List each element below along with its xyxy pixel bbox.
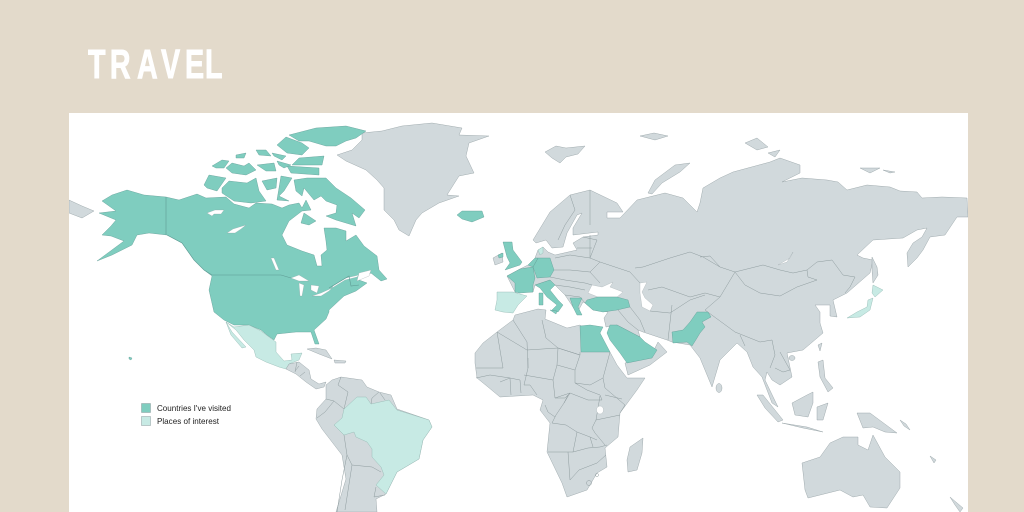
Italy [535,280,563,314]
Egypt [580,325,610,352]
Central America and Caribbean [286,348,346,389]
Chukotka west edge [69,200,94,218]
Brazil [334,397,432,494]
South America borders [317,377,385,512]
Saudi Arabia [607,325,657,363]
South America [316,377,432,512]
Lake Baikal [778,252,793,265]
Caspian Sea [640,282,653,311]
Arabian south coast [625,342,667,375]
Sakhalin [872,257,878,283]
legend label: visited: Countries I've visited [157,403,231,413]
Pakistan [672,312,711,346]
Greenland [337,123,489,236]
Benelux [528,258,538,267]
world map [69,123,968,512]
Canada, USA and Alaska [97,126,387,360]
Africa [475,309,645,497]
Ireland [493,253,503,265]
Black Sea [588,282,623,297]
Iceland [457,211,484,222]
Arctic islands [545,133,895,194]
Mexico [226,322,302,369]
Japan [847,285,883,318]
Denmark [538,247,543,255]
legend swatch: interest [142,416,150,426]
Lake Victoria [596,406,604,414]
legend swatch: visited [142,404,150,412]
France [507,267,535,293]
Spain and Portugal [495,292,527,313]
Madagascar [627,438,643,472]
Eurasia borders [550,190,855,372]
title: TRAVEL [88,42,223,87]
Greece [570,298,582,315]
United Kingdom [503,242,522,270]
legend label: interest: Places of interest [157,416,220,426]
Australia [802,435,900,508]
New Zealand [950,497,963,512]
Northern Ireland [498,253,503,258]
Eurasia [507,158,968,407]
Africa borders [476,320,625,486]
Turkey [585,297,630,312]
panel: world map [69,113,968,512]
Southeast Asia islands [716,343,936,463]
Germany [533,258,554,278]
legend [142,403,231,426]
